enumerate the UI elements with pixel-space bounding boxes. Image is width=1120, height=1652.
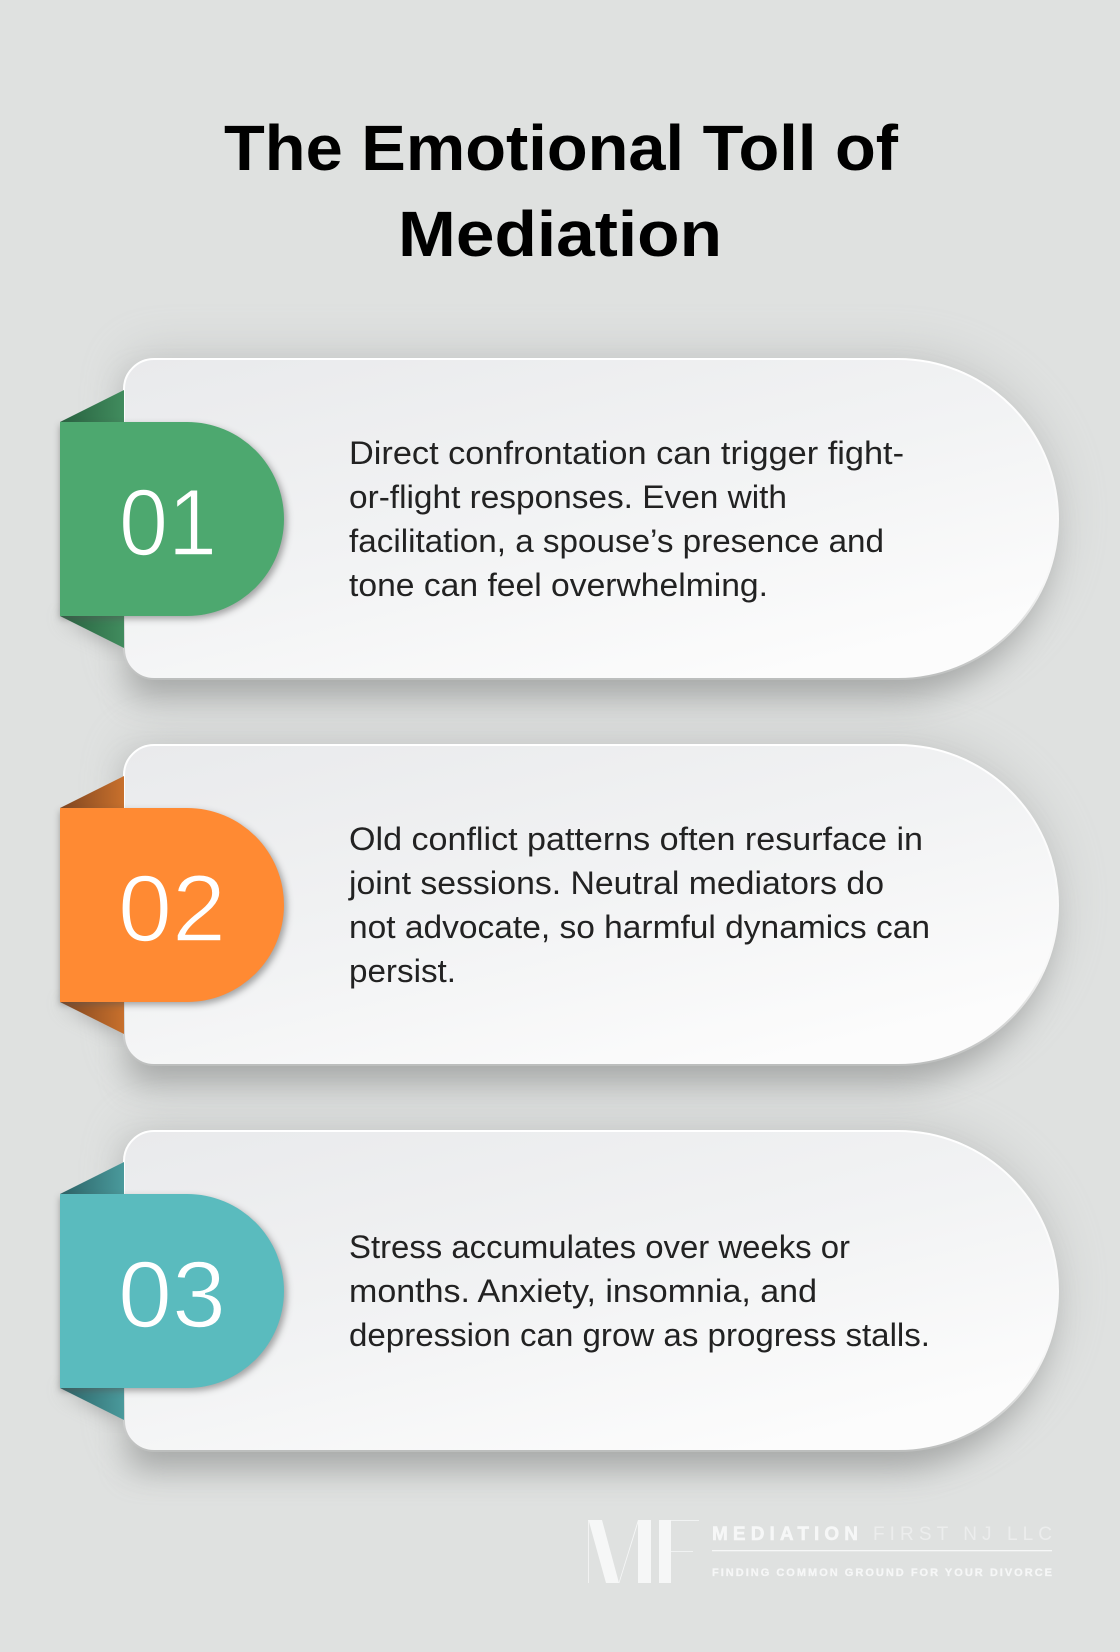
description: Old conflict patterns often resurface in [349, 821, 923, 857]
description [349, 435, 904, 603]
panel: step 02 [60, 736, 1063, 1084]
number badge [60, 808, 284, 1002]
card [124, 745, 1058, 1065]
description: facilitation, a spouse’s presence and [349, 523, 884, 559]
logo divider [712, 1550, 1052, 1551]
description: joint sessions. Neutral mediators do [348, 865, 884, 901]
description: Direct confrontation can trigger fight- [349, 435, 904, 471]
ribbon folds [60, 390, 124, 648]
description: tone can feel overwhelming. [349, 567, 768, 603]
number badge [60, 1194, 284, 1388]
logo: Mediation First NJ LLC: FIRST NJ LLC [873, 1524, 1052, 1545]
company name: MEDIATION [712, 1524, 858, 1545]
number badge [60, 422, 284, 616]
title: Mediation [398, 198, 722, 270]
title: The Emotional Toll of [224, 112, 899, 184]
description: or-flight responses. Even with [349, 479, 787, 515]
description: depression can grow as progress stalls. [349, 1317, 930, 1353]
number: 03 [118, 1242, 226, 1348]
tagline: FINDING COMMON GROUND FOR YOUR DIVORCE [712, 1567, 1052, 1579]
logo: Mediation First NJ LLC [588, 1520, 1052, 1583]
description: months. Anxiety, insomnia, and [349, 1273, 817, 1309]
icon: MF monogram [588, 1520, 699, 1583]
panel: step 01 [60, 350, 1063, 698]
ribbon folds [60, 1162, 124, 1420]
description: Stress accumulates over weeks or [349, 1229, 850, 1265]
description [349, 1229, 930, 1353]
description: persist. [349, 953, 456, 989]
card [124, 359, 1058, 679]
description: not advocate, so harmful dynamics can [349, 909, 930, 945]
ribbon folds [60, 776, 124, 1034]
card [124, 1131, 1058, 1451]
number: 01 [119, 470, 217, 576]
description [348, 821, 930, 989]
panel: step 03 [60, 1122, 1063, 1470]
title [224, 112, 899, 270]
number: 02 [118, 856, 226, 962]
